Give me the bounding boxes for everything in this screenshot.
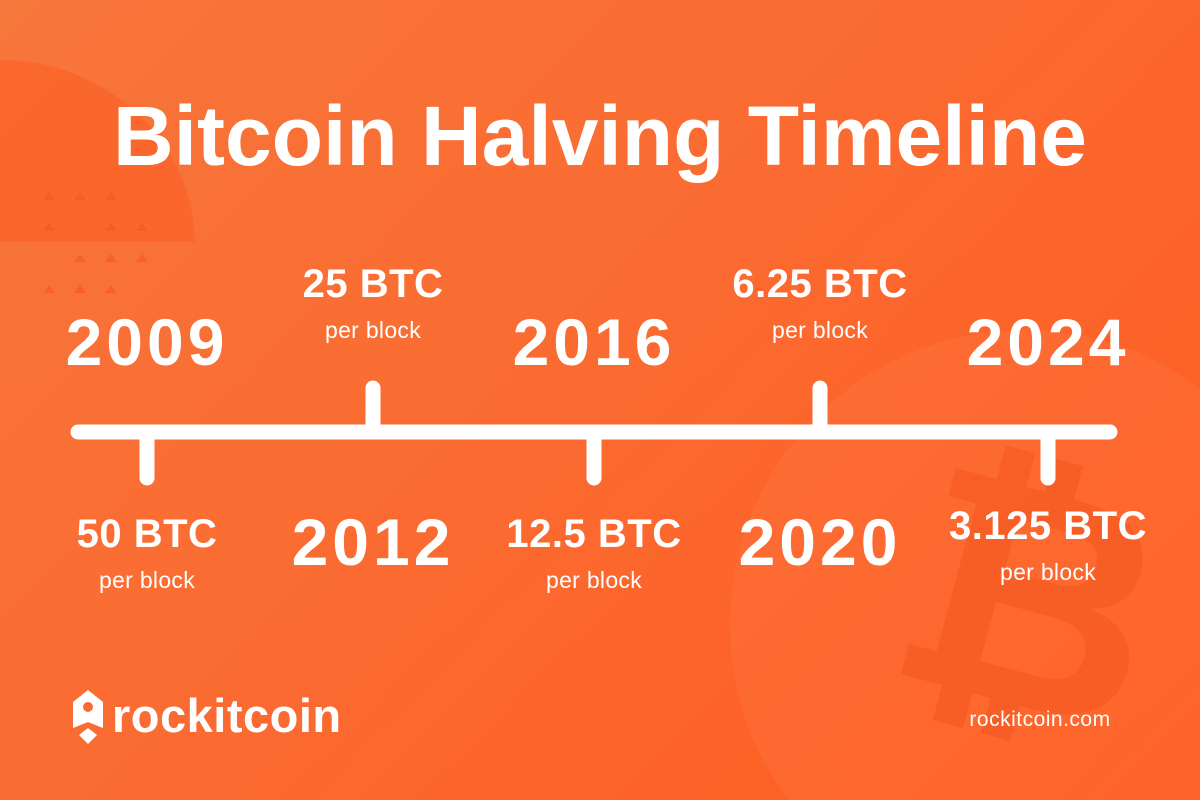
reward 50 BTC: per block [99, 567, 195, 593]
reward 6.25 BTC [732, 262, 908, 343]
title: Bitcoin Halving Timeline [113, 89, 1087, 183]
reward 50 BTC [77, 512, 217, 593]
reward 3.125 BTC: per block [1000, 559, 1096, 585]
year 2024: 2024 [967, 305, 1129, 379]
reward 3.125 BTC: 3.125 BTC [949, 504, 1147, 548]
reward 12.5 BTC: per block [546, 567, 642, 593]
reward 6.25 BTC: per block [772, 317, 868, 343]
reward 3.125 BTC [949, 504, 1147, 585]
year 2016: 2016 [513, 305, 675, 379]
reward 6.25 BTC: 6.25 BTC [732, 262, 908, 306]
logo: rockitcoin [112, 689, 342, 742]
reward 12.5 BTC: 12.5 BTC [506, 512, 682, 556]
year 2020: 2020 [739, 505, 901, 579]
reward 25 BTC [303, 262, 443, 343]
reward 12.5 BTC [506, 512, 682, 593]
background decoration: ₿ [864, 397, 1198, 798]
reward 25 BTC: per block [325, 317, 421, 343]
reward 50 BTC: 50 BTC [77, 512, 217, 556]
year 2009: 2009 [66, 305, 228, 379]
icon: rocket [73, 690, 103, 744]
website url: rockitcoin.com [969, 708, 1111, 731]
year 2012: 2012 [292, 505, 454, 579]
reward 25 BTC: 25 BTC [303, 262, 443, 306]
